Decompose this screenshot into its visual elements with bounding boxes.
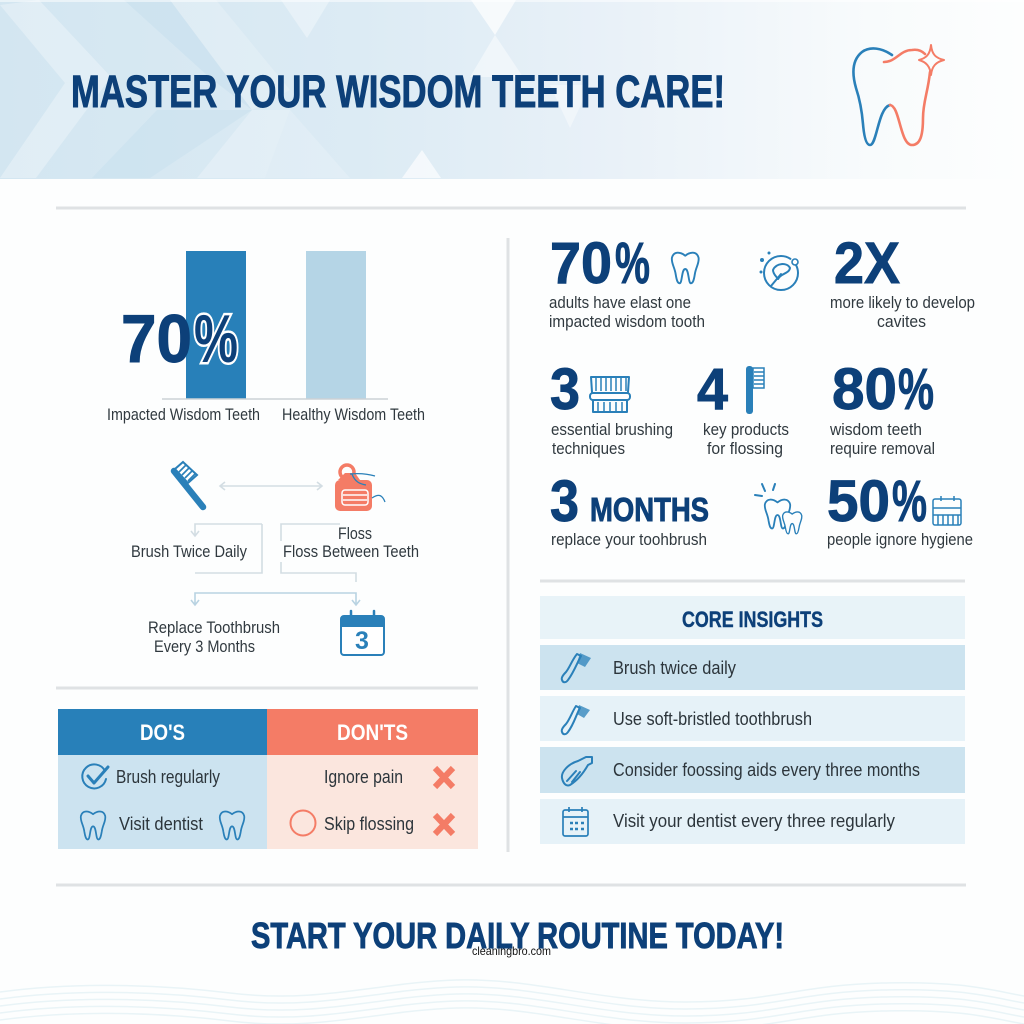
stat 2X: cavites: [877, 313, 926, 331]
bar: impacted: [186, 251, 246, 399]
divider bottom: [56, 884, 966, 886]
connector: floss: [281, 524, 356, 582]
arrow: double: [220, 482, 322, 490]
icon: brush head: [590, 377, 630, 412]
icon: small calendar: [933, 496, 961, 525]
stat 4 products: 4: [697, 357, 728, 422]
stat 80%: %: [898, 357, 934, 422]
title: MASTER YOUR WISDOM TEETH CARE!: [71, 66, 725, 117]
do's body: [58, 755, 267, 849]
stat 4 products: key products: [703, 421, 789, 439]
icon: circle: [290, 810, 316, 836]
stat 2X: 2X: [834, 231, 900, 296]
stat 4 products: for flossing: [707, 440, 783, 458]
header banner: [0, 0, 1024, 179]
panel: do's and don'ts: [58, 709, 478, 849]
stat 70%: adults have elast one: [549, 294, 691, 312]
value 70%: [121, 301, 238, 377]
axis: [162, 398, 388, 400]
label replace: Replace Toothbrush: [148, 619, 280, 637]
don'ts body: [267, 755, 478, 849]
label healthy: Healthy Wisdom Teeth: [282, 406, 425, 424]
label floss: Floss: [338, 525, 372, 543]
icon: tooth left: [81, 811, 105, 839]
value 70%: %: [194, 301, 238, 377]
row: soft toothbrush: Use soft-bristled toothbrush: [613, 709, 812, 729]
stat 3 months: [550, 469, 709, 549]
stat 80%: [829, 357, 935, 458]
panel: stats: [549, 231, 975, 549]
icon: cleaning circle: [760, 252, 798, 290]
label impacted: Impacted Wisdom Teeth: [107, 406, 260, 424]
icon: floss: [335, 465, 385, 511]
footer call to action: START YOUR DAILY ROUTINE TODAY!: [251, 915, 784, 956]
icon: vertical toothbrush: [746, 366, 764, 414]
text ignore pain: Ignore pain: [324, 767, 403, 787]
stat 2X: more likely to develop: [830, 294, 975, 312]
divider left: [56, 686, 478, 690]
icon: tooth: [672, 253, 699, 283]
do's header: [58, 709, 267, 755]
stat 80%: require removal: [830, 440, 935, 458]
value 70%: 70: [121, 301, 192, 377]
core insights title: CORE INSIGHTS: [682, 607, 823, 632]
text skip flossing: Skip flossing: [324, 814, 414, 834]
icon: cross 1: [435, 768, 453, 787]
stat 3 months: MONTHS: [590, 491, 709, 528]
row: brush twice daily: [540, 645, 965, 690]
row: visit dentist: [540, 799, 965, 844]
divider top: [56, 206, 966, 210]
icon: check: [82, 764, 108, 788]
label brush: Brush Twice Daily: [131, 543, 248, 561]
row: flossing aids: Consider foossing aids every three months: [613, 760, 920, 780]
icon: two teeth: [755, 484, 802, 534]
core insights header: [540, 596, 965, 639]
icon: cross 2: [435, 815, 453, 834]
bar chart: [107, 251, 425, 424]
don'ts title: DON'TS: [337, 720, 408, 745]
divider vertical: [506, 238, 510, 852]
stat 50%: 50: [827, 469, 890, 534]
text brush regularly: Brush regularly: [116, 767, 220, 787]
row: brush twice daily: Brush twice daily: [613, 658, 736, 678]
icon: calendar 3: 3: [355, 627, 369, 655]
icon: tooth with sparkle: [854, 45, 944, 145]
text visit dentist: Visit dentist: [119, 814, 203, 834]
don'ts header: [267, 709, 478, 755]
divider right: [540, 580, 965, 582]
row: visit dentist: Visit your dentist every three regularly: [613, 811, 895, 831]
flow diagram: [131, 462, 419, 656]
stat 50%: [827, 469, 973, 549]
footer waves: [0, 980, 1024, 1024]
row: soft toothbrush: [540, 696, 965, 741]
stat 4 products: [697, 357, 789, 458]
stat 70%: [549, 231, 705, 331]
panel: core insights: [540, 596, 965, 844]
stat 50%: people ignore hygiene: [827, 531, 973, 549]
stat 3 months: 3: [550, 469, 579, 534]
icon: tooth right: [220, 811, 244, 839]
row: flossing aids: [540, 747, 965, 793]
do's title: DO'S: [140, 720, 185, 745]
stat 50%: %: [892, 469, 927, 534]
stat 3 techniques: techniques: [552, 440, 625, 458]
stat 2X: [830, 231, 975, 331]
label months: Every 3 Months: [154, 638, 255, 656]
stat 80%: wisdom teeth: [829, 421, 922, 439]
bar: healthy: [306, 251, 366, 399]
stat 70%: %: [615, 231, 650, 296]
stat 70%: 70: [550, 231, 612, 296]
stat 3 months: replace your toohbrush: [551, 531, 707, 549]
stat 70%: impacted wisdom tooth: [549, 313, 705, 331]
watermark: cleaningbro.com: [472, 944, 551, 958]
label floss between: Floss Between Teeth: [283, 543, 419, 561]
stat 3 techniques: [550, 357, 673, 458]
stat 3 techniques: 3: [550, 357, 580, 422]
connector: replace: [191, 593, 360, 605]
connector: brush: [191, 524, 262, 573]
icon: toothbrush: [174, 462, 203, 507]
icon: calendar 3: [341, 611, 384, 655]
stat 3 techniques: essential brushing: [551, 421, 673, 439]
stat 80%: 80: [832, 357, 897, 422]
